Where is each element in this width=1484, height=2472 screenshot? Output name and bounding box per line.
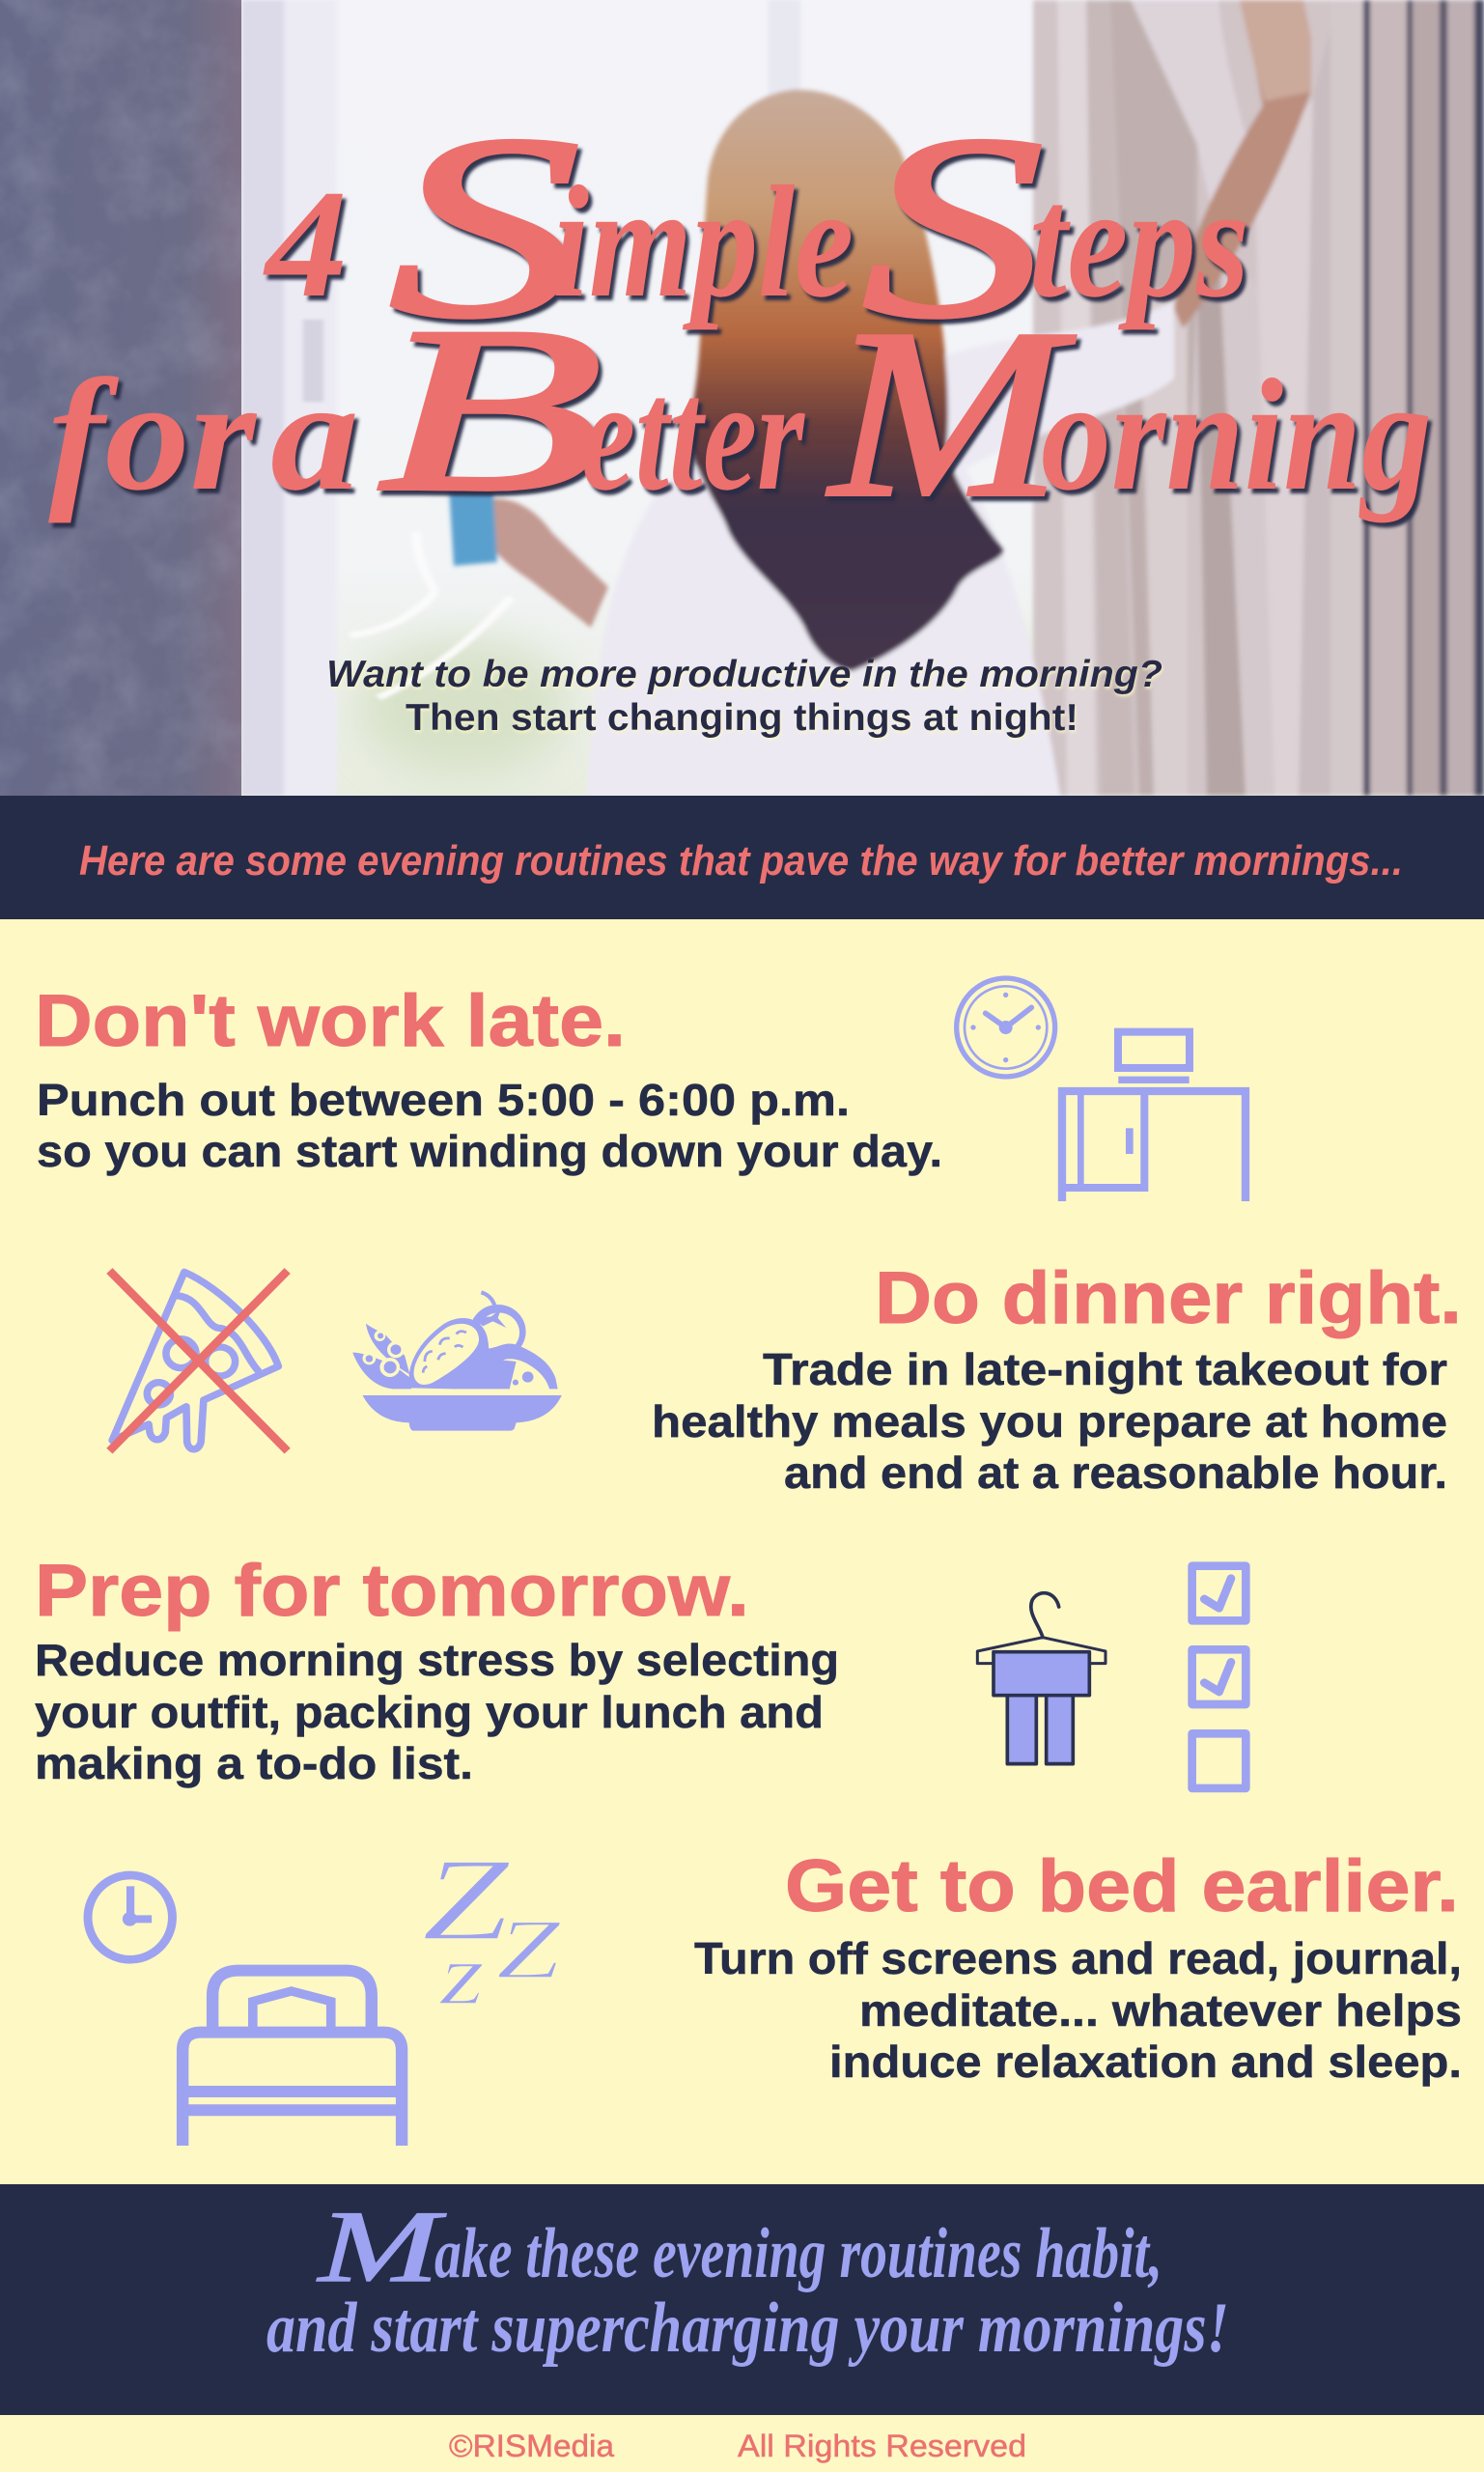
step 1 text: [35, 980, 942, 1176]
step 4 text: Get to bed earlier.: [785, 1845, 1459, 1927]
footer copyright: All Rights Reserved: [738, 2429, 1026, 2463]
step 2 text: and end at a reasonable hour.: [784, 1447, 1447, 1498]
pizza slice: [112, 1272, 278, 1449]
closing message: and start supercharging your mornings!: [266, 2289, 1229, 2368]
icon: checklist: [1192, 1566, 1246, 1788]
tree branch outside window: [350, 532, 511, 698]
step 4 text: induce relaxation and sleep.: [829, 2037, 1462, 2087]
hair: [689, 90, 1003, 671]
hero photo: woman opening curtains: [0, 0, 1484, 796]
hero subtitle: Want to be more productive in the morning?: [326, 654, 1162, 695]
step 3 text: Reduce morning stress by selecting: [35, 1635, 839, 1685]
wall texture: [0, 0, 241, 796]
title: [48, 81, 1432, 548]
footer copyright: ©RISMedia: [449, 2429, 614, 2463]
step 4 text: meditate... whatever helps: [859, 1985, 1462, 2036]
title: imple: [552, 153, 854, 330]
curtains: [1033, 0, 1484, 796]
icon: desk with computer: [1062, 1032, 1246, 1201]
icon: sleeping Zs: Z: [422, 1835, 511, 1965]
title: teps: [1029, 153, 1249, 330]
step 2 text: Do dinner right.: [875, 1257, 1462, 1339]
step 4 text: [694, 1845, 1462, 2087]
icon: clothes on hanger: [977, 1593, 1106, 1764]
icon: wall clock: [957, 978, 1055, 1077]
step 3 text: making a to-do list.: [35, 1738, 473, 1788]
closing message: M: [316, 2190, 447, 2303]
hero subtitle: [326, 654, 1162, 739]
icon: bedtime clock: [88, 1875, 172, 1959]
garden greenery: [357, 637, 1043, 772]
blue cup: [449, 480, 497, 566]
window frame: [241, 0, 800, 796]
intro band: [0, 796, 1484, 919]
step 4 text: Turn off screens and read, journal,: [694, 1933, 1462, 1983]
step 2 text: Trade in late-night takeout for: [763, 1344, 1447, 1394]
red cross: [109, 1271, 288, 1451]
footer copyright: [449, 2429, 1026, 2463]
title: M: [827, 280, 1076, 548]
closing message: ake these evening routines habit,: [434, 2214, 1162, 2293]
step 1 text: Punch out between 5:00 - 6:00 p.m.: [37, 1075, 850, 1125]
closing message: [266, 2190, 1229, 2368]
icon: sleeping Zs: [422, 1835, 561, 2023]
title: for: [48, 346, 257, 523]
raised arm and hand: [1174, 0, 1311, 328]
step 1 text: so you can start winding down your day.: [37, 1126, 942, 1176]
shirt and sleeve: [587, 301, 1174, 796]
title: B: [377, 278, 603, 540]
icon: bed: [182, 1971, 402, 2146]
icon: sleeping Zs: z: [437, 1927, 485, 2023]
step 1 text: Don't work late.: [35, 980, 626, 1062]
step 3 text: your outfit, packing your lunch and: [35, 1687, 824, 1737]
step 3 text: Prep for tomorrow.: [35, 1550, 749, 1632]
icon: crossed-out pizza: [109, 1271, 288, 1451]
step 2 text: healthy meals you prepare at home: [652, 1396, 1447, 1447]
title: S: [861, 81, 1045, 372]
closing band: [0, 2184, 1484, 2415]
step 3 text: [35, 1550, 839, 1788]
title: S: [388, 81, 581, 372]
title: etter: [581, 346, 805, 523]
left arm and hand: [473, 498, 608, 628]
icon: sleeping Zs: Z: [496, 1903, 561, 1997]
hero subtitle: Then start changing things at night!: [406, 697, 1078, 739]
title: orning: [1041, 346, 1432, 523]
step 2 text: [652, 1257, 1462, 1498]
title: 4: [263, 157, 348, 329]
icon: healthy food bowl: [352, 1292, 562, 1431]
title: a: [270, 346, 359, 523]
